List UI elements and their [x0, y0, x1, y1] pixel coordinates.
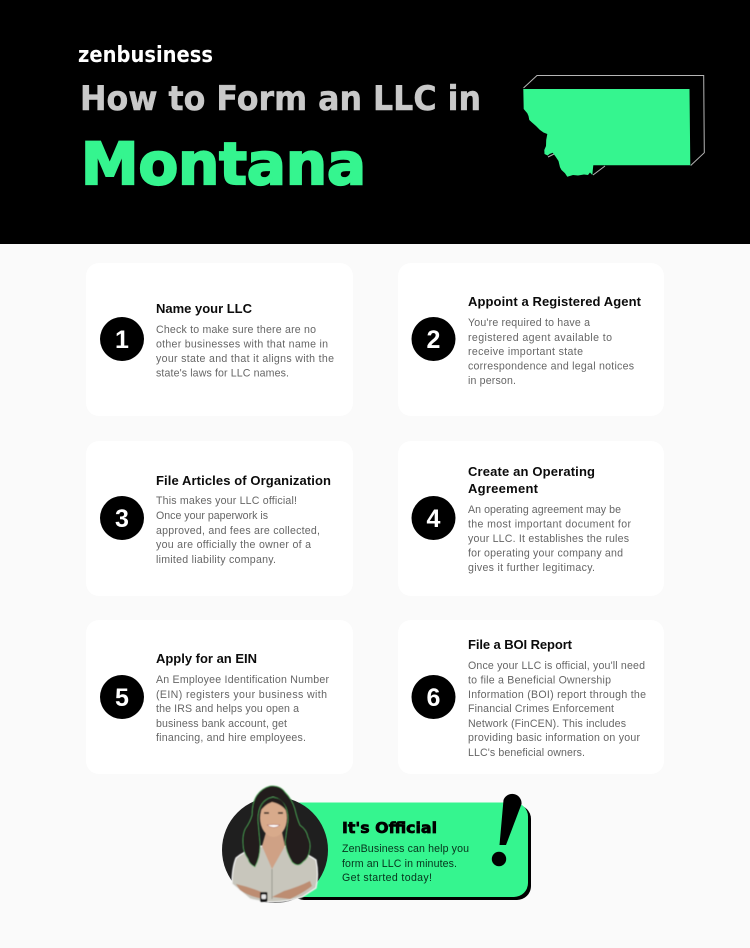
text: step 6: to file a Beneficial Ownership	[468, 674, 611, 686]
panel: step 5	[86, 620, 353, 774]
panel: step 1	[86, 263, 353, 416]
heading: step 1: Name your LLC	[156, 301, 253, 316]
shirt	[232, 846, 318, 902]
step number 3: 3	[115, 505, 129, 533]
callout: It's Official	[285, 794, 531, 900]
neck and chest	[262, 832, 285, 869]
panel: step 6	[398, 620, 664, 774]
text: step 5: business bank account, get	[156, 718, 287, 730]
text: step 3: approved, and fees are collected,	[156, 525, 320, 537]
icon: exclamation mark	[492, 794, 522, 866]
text: step 1: Check to make sure there are no	[156, 324, 316, 336]
step number 1	[100, 317, 144, 361]
watch	[260, 892, 268, 902]
text: step 6: Information (BOI) report through the	[468, 689, 646, 701]
step number 5: 5	[115, 684, 129, 712]
callout text: form an LLC in minutes.	[342, 858, 457, 870]
face	[260, 799, 287, 837]
icon: Montana map	[523, 76, 704, 177]
callout text: ZenBusiness can help you	[342, 843, 469, 855]
heading: step 4	[468, 464, 595, 496]
text: step 2: receive important state	[468, 346, 583, 358]
text: step 1: your state and that it aligns with the	[156, 353, 334, 365]
heading: step 4: Agreement	[468, 481, 539, 496]
text: step 3: you are officially the owner of a	[156, 539, 311, 551]
text: step 4: gives it further legitimacy.	[468, 562, 595, 574]
callout text	[342, 843, 469, 884]
heading: step 3: File Articles of Organization	[156, 473, 331, 488]
heading: step 4: Create an Operating	[468, 464, 595, 479]
text: step 4: for operating your company and	[468, 548, 623, 560]
text: step 5: (EIN) registers your business with	[156, 689, 327, 701]
arms	[236, 881, 312, 899]
step number 2	[412, 317, 456, 361]
logo: zenbusiness	[78, 43, 213, 68]
text: step 3: Once your paperwork is	[156, 510, 268, 522]
text: step 2: in person.	[468, 375, 516, 387]
header band	[0, 0, 750, 244]
panel: step 4	[398, 441, 664, 596]
state name: Montana	[81, 130, 366, 198]
text: step 2: correspondence and legal notices	[468, 360, 634, 372]
text: step 4: An operating agreement may be	[468, 504, 621, 516]
text: step 5	[156, 674, 329, 744]
callout text: Get started today!	[342, 872, 432, 884]
text: step 2: You're required to have a	[468, 317, 590, 329]
heading: step 2: Appoint a Registered Agent	[468, 294, 642, 309]
text: step 5: financing, and hire employees.	[156, 732, 306, 744]
text: step 1: state's laws for LLC names.	[156, 368, 289, 380]
title line: How to Form an LLC in	[80, 79, 481, 119]
text: step 5: the IRS and helps you open a	[156, 703, 299, 715]
text: step 6: Financial Crimes Enforcement	[468, 703, 614, 715]
text: step 6: providing basic information on your	[468, 732, 640, 744]
text: step 6: Once your LLC is official, you'll need	[468, 660, 645, 672]
text: step 6: Network (FinCEN). This includes	[468, 718, 626, 730]
step number 6: 6	[427, 684, 440, 712]
step number 4	[412, 496, 456, 540]
callout heading: It's Official	[342, 819, 437, 837]
heading: step 5: Apply for an EIN	[156, 651, 257, 666]
placket	[271, 869, 273, 899]
step number 4: 4	[427, 505, 441, 533]
step number 6	[412, 675, 456, 719]
text: step 6: LLC's beneficial owners.	[468, 747, 585, 759]
eyes	[264, 812, 283, 814]
step number 1: 1	[115, 326, 129, 354]
text: step 3: This makes your LLC official!	[156, 495, 297, 507]
text: step 1: other businesses with that name in	[156, 338, 328, 350]
hair	[243, 786, 310, 867]
text: step 2	[468, 317, 634, 387]
panel: step 2	[398, 263, 664, 416]
text: step 3: limited liability company.	[156, 554, 276, 566]
text: step 4	[468, 504, 631, 574]
step number 2: 2	[427, 326, 440, 354]
portrait	[222, 786, 328, 903]
panel: step 3	[86, 441, 353, 596]
step number 3	[100, 496, 144, 540]
heading: step 6: File a BOI Report	[468, 637, 573, 652]
text: step 6	[468, 660, 646, 759]
step number 5	[100, 675, 144, 719]
text: step 2: registered agent available to	[468, 332, 612, 344]
text: step 3	[156, 495, 320, 566]
text: step 4: the most important document for	[468, 518, 631, 530]
text: step 1	[156, 324, 334, 380]
text: step 5: An Employee Identification Number	[156, 674, 329, 686]
text: step 4: your LLC. It establishes the rules	[468, 533, 629, 545]
smile	[267, 824, 280, 828]
